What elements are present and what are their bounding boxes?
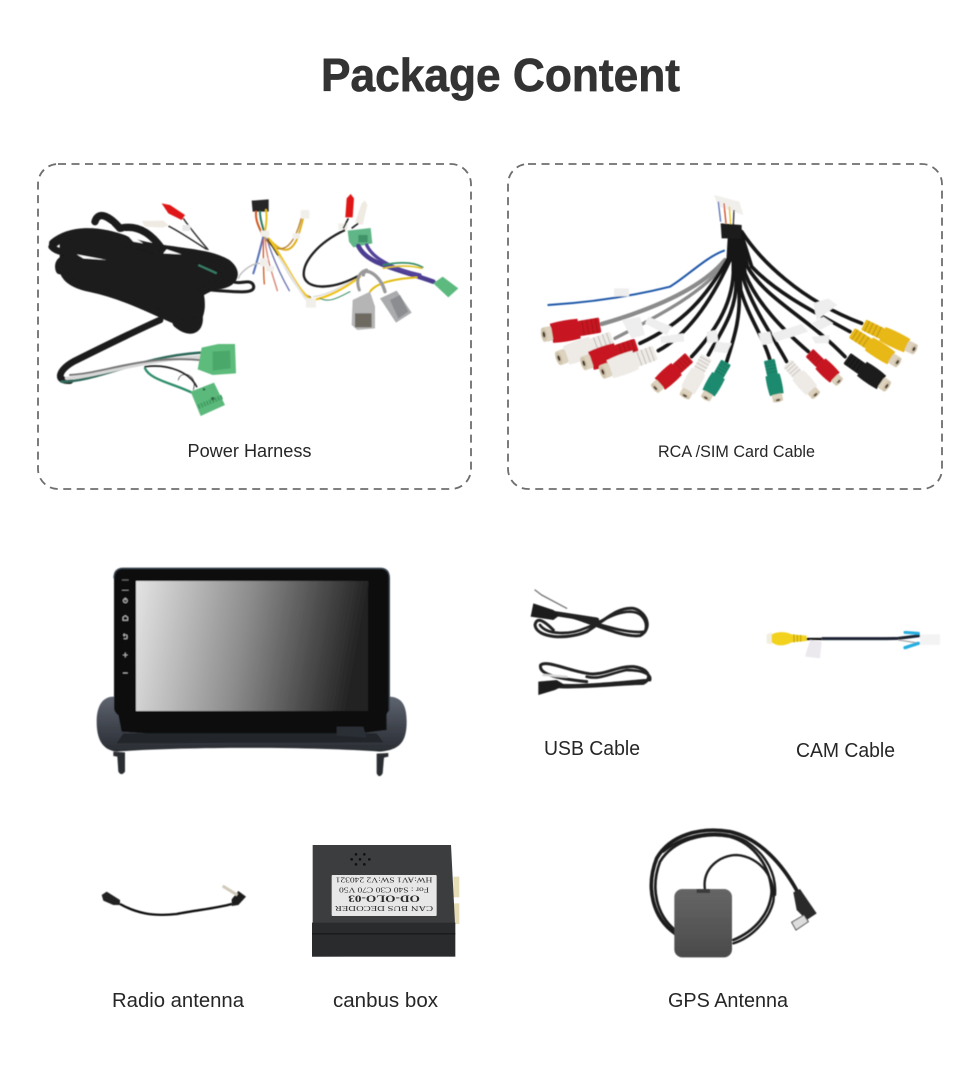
cables [548, 230, 862, 362]
black curved cable [304, 230, 360, 287]
radio antenna cable [102, 886, 246, 915]
label: RCA SIM card cable: RCA /SIM Card Cable [658, 442, 815, 461]
green right plug [433, 277, 458, 297]
grey connector [352, 292, 375, 330]
USB cables [531, 590, 650, 695]
label: canbus box: canbus box [333, 990, 438, 1012]
green plug small [191, 383, 225, 416]
label: CAM cable: CAM Cable [796, 740, 895, 762]
screen [136, 581, 368, 711]
head unit with bezel [97, 568, 407, 776]
black coiled cable [52, 216, 254, 381]
white clips [260, 210, 348, 308]
base recess [117, 710, 387, 733]
GPS antenna [651, 830, 817, 957]
USB cable top [535, 590, 647, 637]
green plug large [198, 344, 236, 375]
decoder label: OD-OLO-03 [347, 894, 420, 904]
decoder label: HW:AV1 SW:V2 240321 [335, 876, 432, 884]
speaker holes [350, 853, 371, 866]
tags [614, 288, 837, 353]
label: power harness: Power Harness [188, 441, 312, 461]
label: GPS antenna: GPS Antenna [668, 990, 789, 1012]
panel: RCA SIM card cable [508, 164, 942, 489]
panel: power harness [38, 164, 471, 489]
USB cable bottom [540, 664, 650, 687]
small RCA plugs left [162, 203, 185, 220]
canbus box [312, 845, 459, 957]
green top plug [348, 228, 372, 247]
RCA right [345, 194, 354, 217]
ISO top connector [252, 199, 269, 212]
base frame [97, 697, 407, 752]
label: USB cable: USB Cable [544, 738, 640, 760]
connectors [539, 315, 602, 346]
title: Package Content [321, 49, 680, 101]
decoder label: For : S40 C30 C70 V50 [338, 885, 429, 893]
top connector [714, 195, 743, 215]
centre wire bundle [238, 210, 360, 302]
bezel [114, 568, 389, 717]
grey connector two [380, 291, 412, 323]
feet [113, 752, 125, 774]
illustration: power harness [52, 194, 458, 416]
striped wires to green plug [62, 353, 200, 393]
decoder label [332, 875, 437, 916]
label: radio antenna: Radio antenna [112, 990, 245, 1012]
purple wires [358, 245, 433, 292]
decoder label: CAN BUS DECODER [334, 904, 433, 912]
illustration: RCA cable [539, 195, 920, 404]
side buttons [122, 580, 129, 673]
CAM cable [767, 632, 940, 658]
